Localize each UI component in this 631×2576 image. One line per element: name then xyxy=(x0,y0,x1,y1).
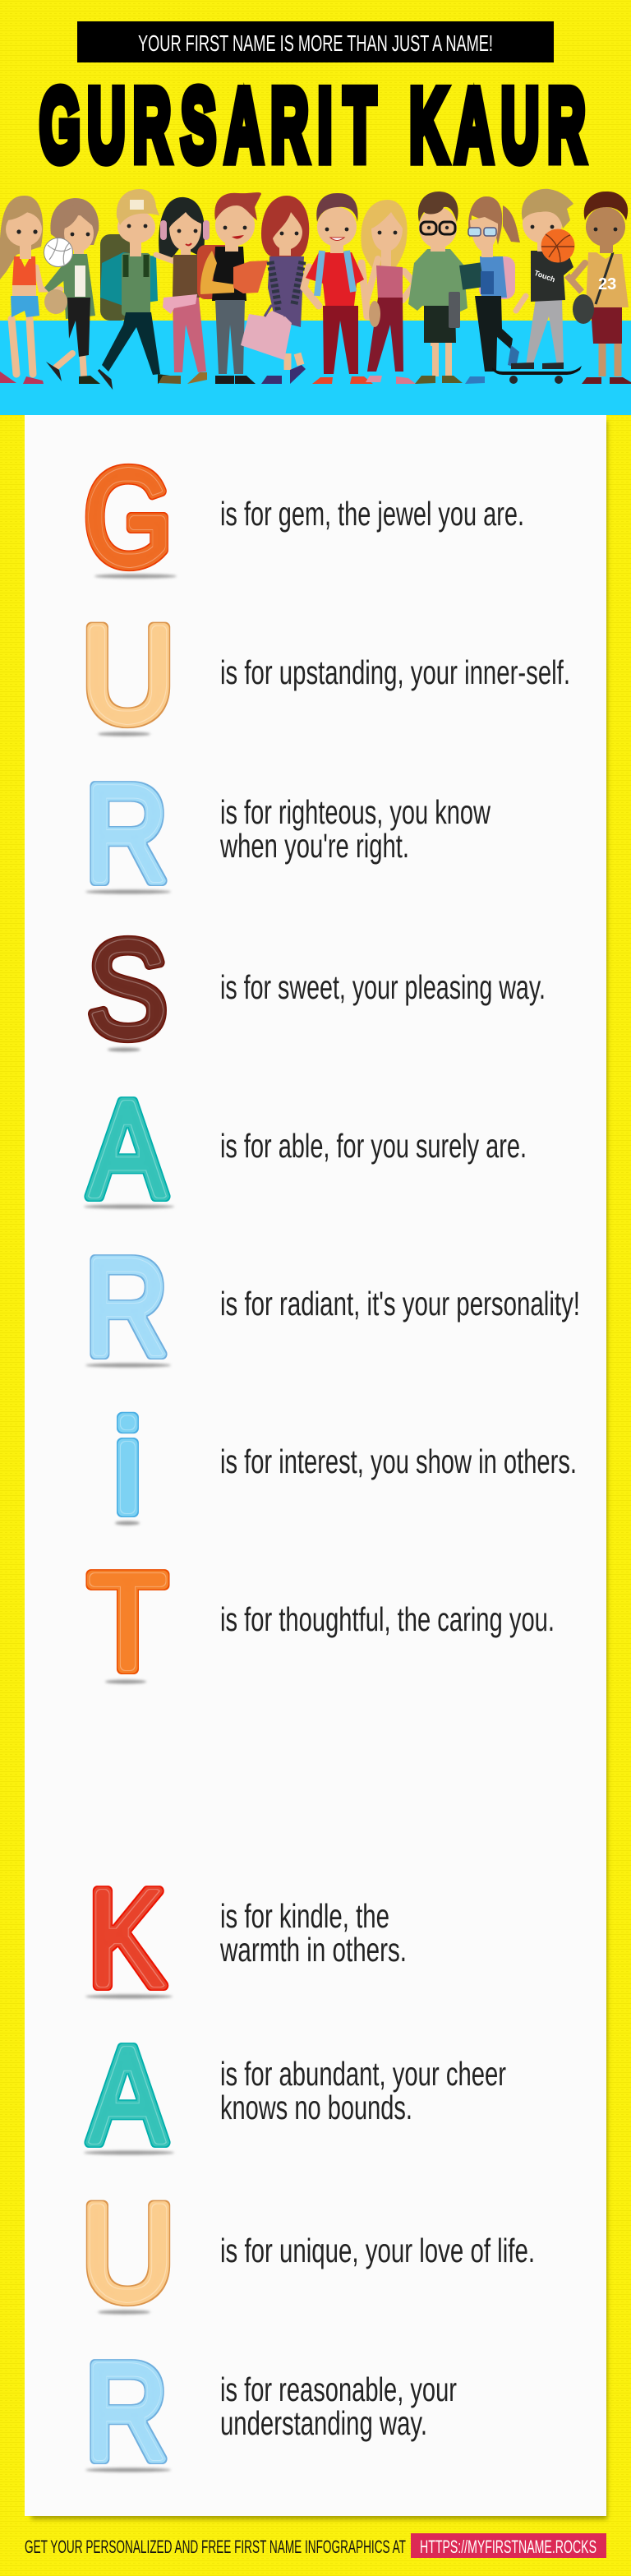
row: R xyxy=(85,2334,457,2488)
row: G: G xyxy=(84,441,173,594)
person: boy with cap and backpack xyxy=(99,189,170,385)
person: girl in orange top xyxy=(0,196,61,384)
title: GURSARIT KAUR xyxy=(39,69,586,183)
row: U xyxy=(81,598,570,751)
row: U: U xyxy=(81,2176,175,2329)
row: R xyxy=(85,756,491,910)
illustration: group of students xyxy=(0,189,631,385)
person: boy with book xyxy=(197,192,268,384)
tagline banner xyxy=(77,21,554,62)
row: S: S xyxy=(87,913,168,1066)
person: girl with headphones xyxy=(156,197,210,384)
panel: letters xyxy=(25,415,607,2519)
person: girl with volleyball xyxy=(44,198,100,384)
row: A xyxy=(84,1073,527,1226)
row: R: is for reasonable, your xyxy=(220,2371,457,2408)
footer call to action: GET YOUR PERSONALIZED AND FREE FIRST NAME INFOGRAPHICS AT xyxy=(25,2537,406,2557)
row: R xyxy=(85,1230,580,1383)
row: A: knows no bounds. xyxy=(220,2089,412,2126)
row: R: R xyxy=(85,756,168,910)
row: R: R xyxy=(85,2334,168,2488)
row: K xyxy=(85,1862,407,2015)
row: R: understanding way. xyxy=(220,2404,427,2442)
person: boy in basketball jersey xyxy=(571,192,631,384)
person: boy in basketball jersey: 23 xyxy=(598,275,616,293)
person: boy with glasses and laptop xyxy=(408,192,467,384)
person: skater with basketball: Touch xyxy=(533,269,556,284)
row: S xyxy=(87,913,546,1066)
row: U xyxy=(81,2176,535,2329)
person: boy in red shirt xyxy=(304,193,373,384)
person: blonde girl with shoulder bag xyxy=(361,200,416,384)
row: T: T xyxy=(88,1545,168,1698)
panel shadow xyxy=(31,421,607,2519)
row: T xyxy=(88,1545,555,1698)
row: A: is for abundant, your cheer xyxy=(220,2055,506,2093)
row: i xyxy=(113,1394,577,1540)
row: K: is for kindle, the xyxy=(220,1897,389,1935)
blue floor band xyxy=(0,321,631,415)
row: R: R xyxy=(85,1230,168,1383)
row: R: is for righteous, you know xyxy=(220,793,491,831)
person: girl with ponytail xyxy=(459,196,520,384)
person: girl with pink bag xyxy=(241,196,309,384)
row: G xyxy=(84,441,524,594)
person: skater with basketball xyxy=(492,189,582,384)
row: K: warmth in others. xyxy=(219,1931,407,1969)
row: A: A xyxy=(89,2019,167,2172)
row: A xyxy=(84,2019,506,2172)
row: R: when you're right. xyxy=(219,827,409,865)
row: i: i xyxy=(113,1394,142,1540)
row: K: K xyxy=(88,1862,165,2015)
row: U: U xyxy=(81,598,175,751)
panel surface xyxy=(25,415,606,2516)
row: A: A xyxy=(89,1073,167,1226)
